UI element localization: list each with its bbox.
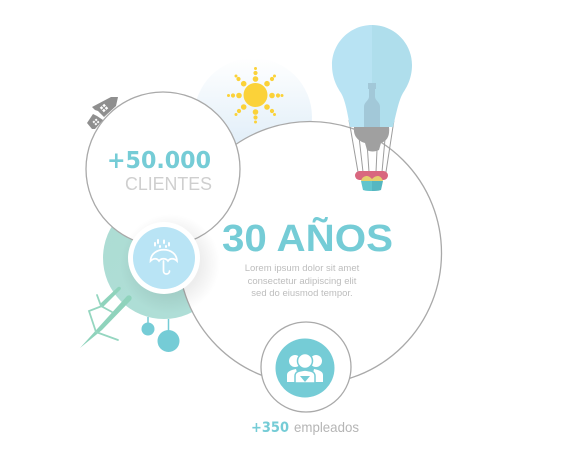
shadow [120,214,220,314]
icon: umbrella [150,240,177,274]
text block: lorem: sed do eiusmod tempor. [251,288,353,299]
text block: lorem: Lorem ipsum dolor sit amet [245,263,360,274]
panel: clientes circle [86,92,240,246]
stat: empleados [251,419,359,436]
icon: houses [87,97,118,129]
umbrella badge [120,214,220,314]
balloon envelope [332,25,372,127]
balloon ropes [349,120,394,172]
background blob: sky [194,58,312,176]
balloon base [354,127,389,152]
green ring [103,197,225,319]
badge disc [128,222,200,294]
stat: empleados: +350 [251,420,289,436]
empleados badge [261,322,351,412]
text block: lorem [245,263,360,299]
stat: clientes [107,148,212,194]
icon: plant branch [80,287,132,348]
icon: hanging dots [142,317,180,352]
text block: lorem: consectetur adipiscing elit [248,276,357,287]
stat: clientes: +50.000 [107,148,211,174]
heading: 30 años: 30 AÑOS [222,216,393,260]
stat: clientes: CLIENTES [125,174,212,194]
icon: people [287,354,323,383]
icon: sun [227,67,284,124]
panel: main circle [178,122,442,384]
basket [355,171,388,191]
balloon [332,25,412,191]
stat: empleados: empleados [294,419,359,435]
bottle [364,83,380,127]
